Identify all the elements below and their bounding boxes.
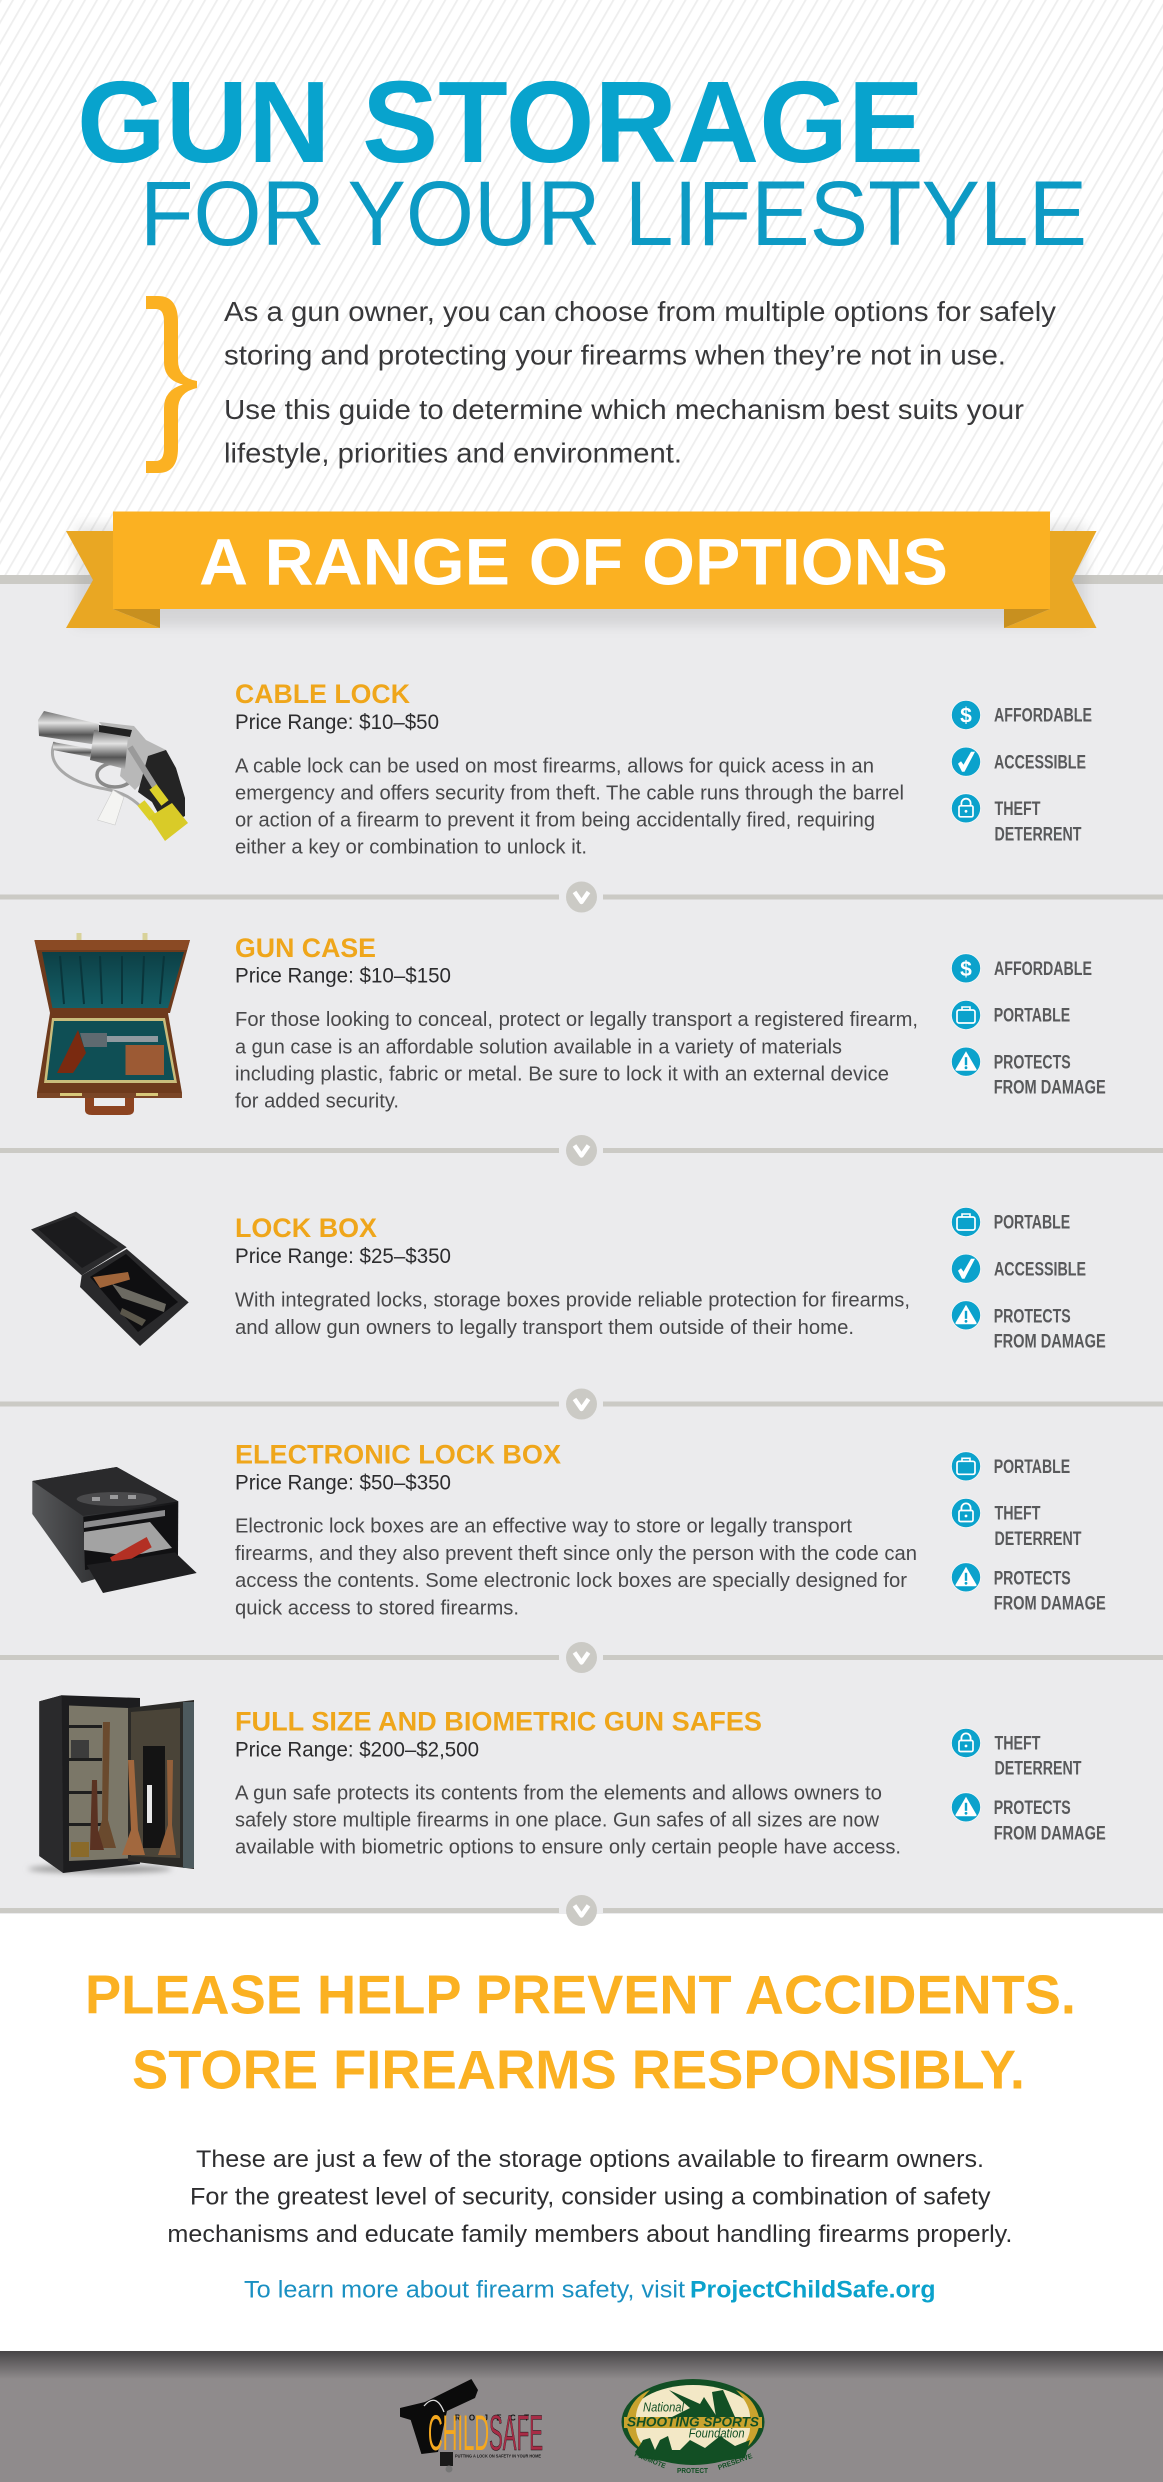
banner: a range of options: A RANGE OF OPTIONS [199,524,948,598]
photo: open briefcase gun case [34,933,190,1115]
panel: full size and biometric gun safes: Price Range: $200–$2,500 [235,1738,479,1761]
panel: electronic lock box [32,1440,1106,1619]
description: available with biometric options to ensure only certain people have access. [235,1837,901,1859]
panel: electronic lock box: Price Range: $50–$350 [235,1471,451,1494]
badge: theft deterrent: DETERRENT [994,1529,1082,1550]
logo: national shooting sports foundation: Foundation [689,2426,745,2440]
logo: project childsafe [400,2379,543,2472]
logo: national shooting sports foundation: PROTECT [677,2468,709,2475]
logo: national shooting sports foundation [622,2379,764,2475]
infographic canvas: SAFE [489,2405,543,2461]
badge: theft deterrent: THEFT [994,1733,1041,1754]
intro text: As a gun owner, you can choose from multiple options for safely [224,296,1056,327]
title: FOR YOUR LIFESTYLE [140,163,1087,265]
description: emergency and offers security from theft. The cable runs through the barrel [235,783,904,805]
photo: open gun safe [28,1695,194,1873]
description: safely store multiple firearms in one place. Gun safes of all sizes are now [235,1810,880,1832]
badge: protects from damage: FROM DAMAGE [994,1078,1106,1099]
badge: portable: PORTABLE [994,1213,1070,1234]
call to action link [244,2277,936,2304]
closing text: mechanisms and educate family members about handling firearms properly. [167,2221,1012,2248]
description: firearms, and they also prevent theft since only the person with the code can [235,1543,917,1565]
badge: protects from damage [951,1793,1106,1844]
logo: national shooting sports foundation: PRESERVE [717,2453,754,2472]
badge: protects from damage: FROM DAMAGE [994,1823,1106,1844]
badge: protects from damage: PROTECTS [994,1798,1071,1819]
badge: theft deterrent [951,1498,1082,1550]
panel: lock box: Price Range: $25–$350 [235,1245,451,1268]
badge: portable [951,1207,1070,1237]
badge: theft deterrent: DETERRENT [994,824,1082,845]
badge: affordable [951,954,1092,983]
logo: national shooting sports foundation: National [643,2401,685,2415]
description: With integrated locks, storage boxes provide reliable protection for firearms, [235,1290,910,1312]
logo: project childsafe: PROJECT [441,2414,529,2422]
logo: project childsafe: PUTTING A LOCK ON SAFETY IN YOUR HOME [455,2454,541,2458]
badge: theft deterrent [951,794,1082,845]
description [235,1290,910,1339]
title [77,57,1087,265]
badge: protects from damage: FROM DAMAGE [994,1593,1106,1614]
badge: theft deterrent [951,1728,1082,1780]
badge: theft deterrent: THEFT [994,799,1041,820]
divider with chevron [0,1135,1163,1166]
photo: revolver with cable lock [38,711,188,841]
description [235,1009,918,1112]
panel: lock box [31,1207,1106,1352]
panel: lock box: LOCK BOX [235,1213,377,1243]
banner: a range of options [66,512,1096,628]
description: A cable lock can be used on most firearms, allows for quick acess in an [235,755,874,777]
badge: protects from damage: PROTECTS [994,1568,1071,1589]
description: quick access to stored firearms. [235,1597,519,1619]
icon: orange brace [146,296,197,473]
badge: theft deterrent: DETERRENT [994,1759,1082,1780]
badge: accessible [951,747,1086,776]
panel: gun case: Price Range: $10–$150 [235,964,451,987]
badge: accessible [951,1254,1086,1283]
description: including plastic, fabric or metal. Be sure to lock it with an external device [235,1063,889,1085]
badge: theft deterrent: THEFT [994,1504,1041,1525]
call to action link: ProjectChildSafe.org [690,2277,936,2304]
intro text: storing and protecting your firearms when they’re not in use. [224,340,1006,370]
header hatched background [0,0,1163,576]
closing text: These are just a few of the storage options available to firearm owners. [196,2146,984,2173]
photo: open lock box [31,1212,189,1346]
panel: gun case [34,933,1106,1115]
logo: national shooting sports foundation: PROMOTE [633,2451,667,2470]
badge: protects from damage [951,1047,1106,1099]
footer band [0,2351,1163,2482]
logo: project childsafe: CHILD [428,2405,489,2461]
panel: electronic lock box: ELECTRONIC LOCK BOX [235,1440,561,1470]
badge: affordable [951,700,1092,730]
divider with chevron [0,1388,1163,1420]
closing headline [85,1964,1076,2101]
badge: protects from damage [951,1563,1106,1614]
panel: cable lock: CABLE LOCK [235,679,410,709]
logo: national shooting sports foundation: SHOOTING SPORTS [627,2415,759,2430]
description: A gun safe protects its contents from the elements and allows owners to [235,1782,882,1804]
call to action link: To learn more about firearm safety, visit [244,2277,685,2304]
intro text: lifestyle, priorities and environment. [224,438,682,468]
description: access the contents. Some electronic lock boxes are specially designed for [235,1570,907,1592]
description: a gun case is an affordable solution available in a variety of materials [235,1036,842,1058]
description [235,755,904,859]
badge: protects from damage: PROTECTS [994,1053,1071,1074]
badge: portable [951,1000,1070,1030]
divider with chevron [0,1642,1163,1673]
badge: protects from damage [951,1301,1106,1352]
badge: protects from damage: FROM DAMAGE [994,1331,1106,1352]
badge: portable [951,1452,1070,1481]
description: and allow gun owners to legally transport them outside of their home. [235,1317,854,1339]
photo: electronic lock box [32,1467,197,1593]
badge: protects from damage: PROTECTS [994,1306,1071,1327]
badge: affordable: AFFORDABLE [994,706,1092,727]
panel: gun case: GUN CASE [235,933,376,963]
closing headline: STORE FIREARMS RESPONSIBLY. [132,2039,1025,2101]
title: GUN STORAGE [77,57,924,187]
panel: full size and biometric gun safes [28,1695,1106,1873]
badge: affordable: AFFORDABLE [994,959,1092,980]
panel: cable lock [38,679,1092,859]
intro text [224,296,1056,468]
badge: accessible: ACCESSIBLE [994,753,1086,774]
description: Electronic lock boxes are an effective way to store or legally transport [235,1516,852,1538]
divider with chevron [0,1895,1163,1926]
badge: portable: PORTABLE [994,1457,1070,1478]
description [235,1782,901,1859]
intro text: Use this guide to determine which mechanism best suits your [224,394,1024,425]
closing text [167,2146,1012,2248]
badge: portable: PORTABLE [994,1006,1070,1027]
description: for added security. [235,1090,399,1112]
options panel background [0,575,1163,1914]
panel: cable lock: Price Range: $10–$50 [235,711,439,734]
description [235,1516,917,1619]
description: For those looking to conceal, protect or legally transport a registered firearm, [235,1009,918,1031]
badge: accessible: ACCESSIBLE [994,1260,1086,1281]
description: either a key or combination to unlock it. [235,837,587,859]
divider with chevron [0,882,1163,912]
closing headline: PLEASE HELP PREVENT ACCIDENTS. [85,1964,1076,2026]
closing text: For the greatest level of security, consider using a combination of safety [190,2184,990,2211]
description: or action of a firearm to prevent it from being accidentally fired, requiring [235,810,875,832]
panel: full size and biometric gun safes: FULL SIZE AND BIOMETRIC GUN SAFES [235,1707,762,1737]
